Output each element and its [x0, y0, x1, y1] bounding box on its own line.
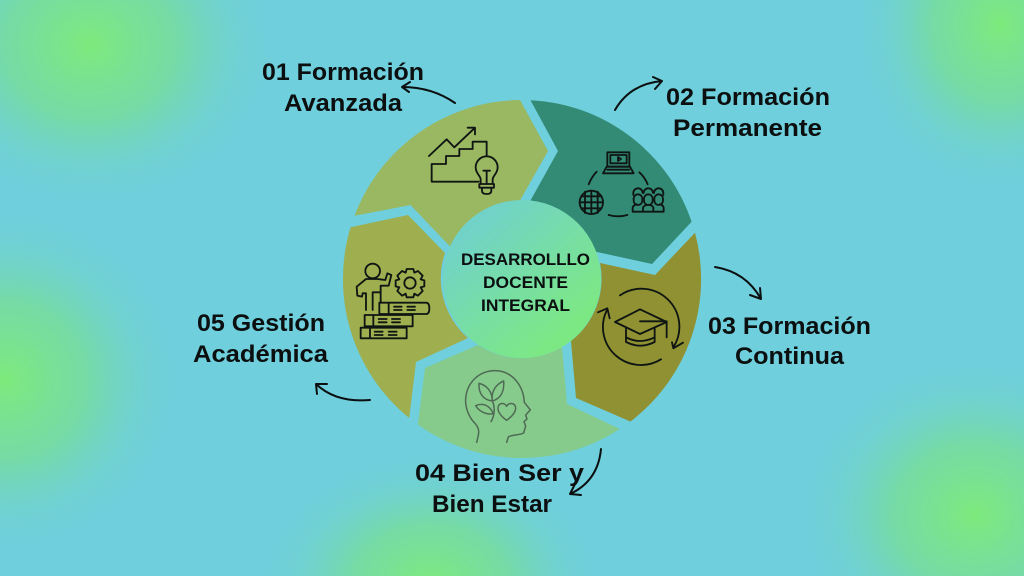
segment 05	[343, 215, 468, 418]
cycle diagram	[343, 100, 701, 458]
arrow 05	[316, 384, 370, 400]
label 02: Permanente	[673, 115, 822, 142]
label 05	[193, 310, 328, 368]
label 01: 01 Formación	[262, 59, 424, 86]
segment 03	[571, 233, 701, 422]
icon: online learning network	[580, 152, 664, 216]
segment 01	[354, 100, 548, 246]
arrow 02	[615, 77, 662, 110]
label 03	[708, 313, 871, 370]
label 04: 04 Bien Ser y	[415, 460, 584, 487]
center title	[461, 251, 590, 315]
label 05: Académica	[193, 341, 328, 368]
icon: person climbing books with gear	[357, 264, 429, 338]
arrow 04	[570, 449, 601, 495]
label 01: Avanzada	[284, 90, 402, 117]
label 04	[415, 460, 584, 518]
segment 04	[418, 345, 620, 458]
icon: graduation cap with cycle arrows	[598, 289, 683, 365]
label 03: Continua	[735, 343, 844, 370]
label 02	[666, 84, 830, 142]
arrow 03	[715, 267, 761, 299]
arrow 01	[402, 82, 455, 103]
icon: head with plant and heart	[466, 371, 530, 442]
label 04: Bien Estar	[432, 491, 552, 518]
label 05: 05 Gestión	[197, 310, 325, 337]
label 03: 03 Formación	[708, 313, 871, 340]
segment 02	[530, 100, 692, 264]
center circle	[443, 200, 601, 358]
center title: DOCENTE	[483, 274, 568, 292]
label 02: 02 Formación	[666, 84, 830, 111]
label 01	[262, 59, 424, 117]
center title: DESARROLLLO	[461, 251, 590, 269]
icon: stairs and light bulb	[429, 128, 498, 194]
center title: INTEGRAL	[481, 297, 570, 315]
